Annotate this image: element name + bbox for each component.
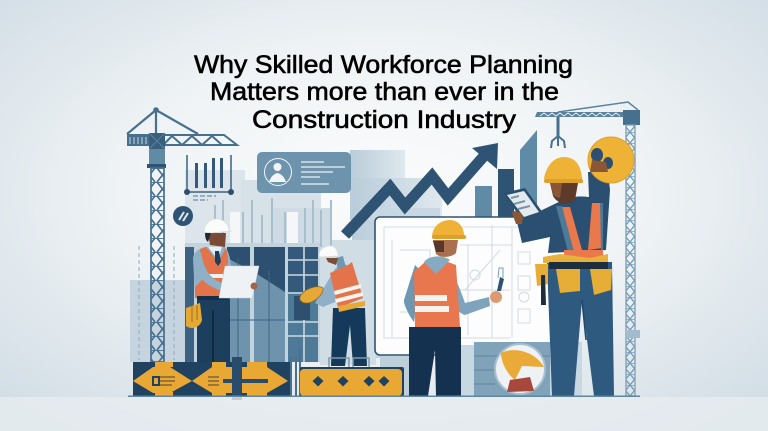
bar chart icon — [184, 155, 234, 200]
right foreground worker — [503, 137, 634, 396]
equipment case with helmet porthole — [474, 342, 550, 396]
title: Why Skilled Workforce Planning — [194, 51, 573, 79]
glass building — [185, 243, 320, 396]
bottom floor band — [0, 397, 768, 431]
bars behind arrow — [475, 130, 537, 217]
ground line — [128, 396, 640, 397]
blueprint board — [375, 217, 565, 355]
center foreground worker — [404, 220, 504, 396]
left tower crane — [127, 107, 237, 362]
title: Construction Industry — [252, 106, 517, 134]
pale blocks beside center worker — [380, 342, 582, 396]
rising arrow — [345, 143, 498, 235]
middle worker — [300, 246, 369, 367]
title — [194, 51, 573, 134]
dashed guide lines — [139, 246, 174, 360]
round badge icon — [173, 206, 193, 226]
left foreground worker — [186, 219, 259, 362]
right yellow machinery — [300, 367, 404, 396]
profile card — [257, 152, 351, 193]
background city skyline — [130, 150, 442, 365]
title: Matters more than ever in the — [210, 78, 559, 106]
left yellow machinery — [133, 357, 290, 400]
right tower crane — [535, 102, 640, 396]
